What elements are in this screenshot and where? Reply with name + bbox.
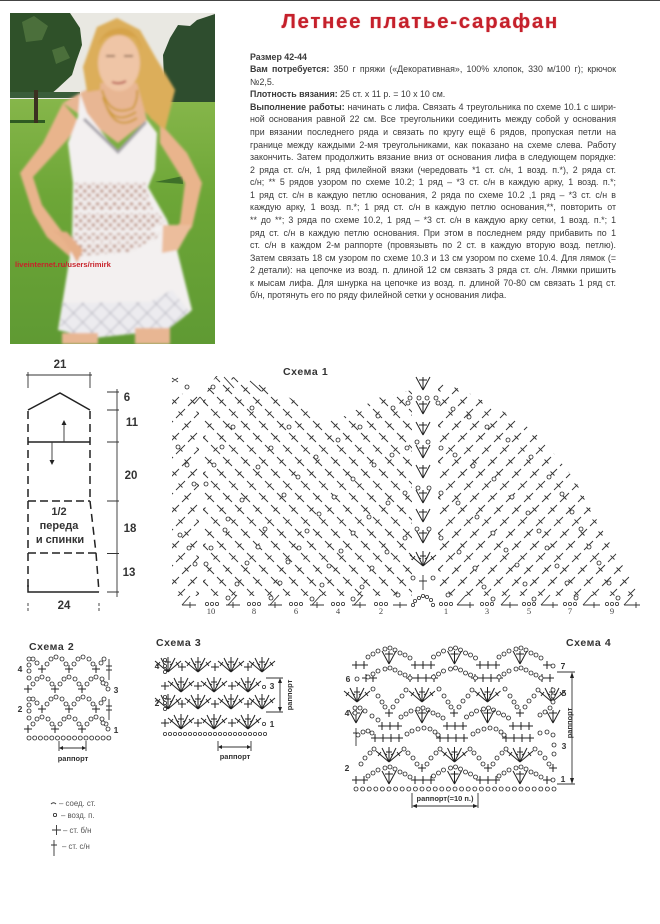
scheme 3 heading: Схема 3 — [156, 637, 201, 649]
pattern outline: half of front and back — [26, 359, 139, 612]
scheme 1: base row: 6 — [294, 606, 298, 616]
scheme 3 — [155, 637, 294, 761]
scheme 2 row numbers: 4 — [18, 664, 23, 674]
scheme 2 — [18, 641, 119, 763]
scheme 4 chart — [344, 648, 565, 789]
instructions text: к мысам лифа. Для шнурка на цепочке из возд. п. длиной 70-80 см связать 1 ряд ст. — [250, 278, 616, 288]
legend of symbols — [51, 799, 96, 856]
legend: single crochet: – ст. б/н — [63, 826, 91, 835]
instructions text: закончить. Затем продолжить вязание вниз от основания лифа в следующем порядке: — [250, 152, 616, 162]
photo background: grass and trees — [10, 13, 215, 344]
instructions text: Затем связать 18 см узором по схеме 10.3 и 13 см узором по схеме 10.4. Для лямок (= — [250, 253, 616, 263]
scheme 3 chart — [155, 657, 275, 734]
instructions text: ной основания равной 22 см. Все треугольники соединить между собой у основания — [250, 114, 616, 124]
scheme 4 heading: Схема 4 — [566, 637, 611, 649]
instructions text: с/н; ** 5 рядов узором по схеме 10.2; 1 ряд – *3 ст. с/н в каждую арку, 1 возд. п.*; — [250, 177, 616, 187]
scheme 1 heading: Схема 1 — [283, 366, 328, 378]
scheme 3 row numbers: 3 — [270, 681, 275, 691]
scheme 4 row numbers: 5 — [562, 688, 567, 698]
instructions text: Выполнение работы: начинать с лифа. Связать 4 треугольника по схеме 10.1 с шири- — [250, 102, 616, 112]
photo: woman in white crochet dress — [10, 13, 215, 344]
dimension 24: 24 — [58, 600, 71, 612]
scheme 1: base row: 4 — [336, 606, 341, 616]
scheme 2 repeat arrow: раппорт — [58, 754, 89, 763]
scheme 3 row numbers: 1 — [270, 719, 275, 729]
photo: model figure — [20, 18, 202, 344]
scheme 1: base row — [182, 595, 640, 616]
scheme 4 row numbers: 1 — [561, 774, 566, 784]
instructions text: Плотность вязания: 25 ст. х 11 р. = 10 х 10 см. — [250, 89, 445, 99]
garment outline — [28, 393, 99, 592]
instructions text — [250, 52, 616, 300]
scheme 1: base row: 1 — [444, 606, 448, 616]
height dimensions: 13 — [123, 567, 135, 579]
instructions text: 2 ряда ст. с/н, 1 ряд филейной вязки (чередовать *1 ст. с/н, 1 возд. п.*), 2 ряда ст. — [250, 165, 616, 175]
instructions text: при вязании последнего ряда и связать по кругу ещё 6 рядов, пропуская петли на — [250, 127, 616, 137]
scheme 3 side repeat arrow: раппорт — [285, 679, 294, 710]
dimension 24 — [28, 600, 99, 612]
legend: slip stitch: – соед. ст. — [59, 799, 96, 808]
legend: chain stitch: – возд. п. — [61, 811, 94, 820]
scheme 3 bottom repeat arrow: раппорт — [220, 752, 251, 761]
scheme 1: chain rings — [178, 387, 618, 599]
height dimensions: 11 — [126, 417, 139, 429]
watermark: liveinternet.ru/users/rimirk — [15, 260, 112, 269]
scheme 4 row numbers: 6 — [346, 674, 351, 684]
height dimensions: 20 — [125, 470, 137, 482]
dimension 21 — [26, 359, 92, 388]
dimension 21: 21 — [54, 359, 67, 371]
instructions text: ** до **; 3 ряда по схеме 10.2, 1 ряд – *3 ст. с/н в каждую арку сетки, 1 возд. п.*; 1 — [250, 215, 616, 225]
instructions text: ряд ст. с/н в каждую петлю основания. При этом в последнем ряду прибавить по 1 — [250, 228, 616, 238]
scheme 4 row numbers: 2 — [345, 763, 350, 773]
scheme 2 row numbers: 2 — [18, 704, 23, 714]
scheme 1: base row: 9 — [610, 606, 614, 616]
scheme 3 row numbers: 2 — [155, 698, 160, 708]
scheme 4 row numbers: 3 — [562, 741, 567, 751]
instructions text: б/н, протянуть его по ряду филейной сетки у основания лифа. — [250, 290, 506, 300]
instructions text: 1 ряд ст. с/н в каждую петлю основания, 2 ряда по схеме 10.2 ,1 ряд – *3 ст. с/н в — [250, 190, 616, 200]
scheme 3 row numbers: 4 — [155, 661, 160, 671]
scheme 1: base row: 8 — [252, 606, 256, 616]
scheme 1: base row: 3 — [485, 606, 489, 616]
scheme 1: base row: 2 — [379, 606, 383, 616]
label: 1/2 front and back: и спинки — [36, 534, 84, 546]
page top edge — [0, 0, 660, 1]
instructions text: Размер 42-44 — [250, 52, 307, 62]
scheme 2 heading: Схема 2 — [29, 641, 74, 653]
instructions text: ст. с/н в каждом 2-м раппорте (провязывть по 2 ст. в каждую вторую возд. петлю). — [250, 240, 616, 250]
height dimensions — [107, 389, 139, 597]
height dimensions: 18 — [124, 523, 137, 535]
scheme 2 chart — [28, 657, 112, 738]
scheme 1: base row: 7 — [568, 606, 572, 616]
scheme 4 row numbers: 4 — [345, 708, 350, 718]
instructions text: 2 детали): на цепочке из возд. п. длиной 12 см связать 3 ряда ст. с/н. Лямки пришить — [250, 265, 616, 275]
label: 1/2 front and back: 1/2 — [51, 506, 67, 518]
scheme 4 bottom repeat arrow: раппорт(=10 п.) — [417, 794, 474, 803]
instructions text: каждую арку, 1 возд. п.*; 1 ряд ст. с/н в каждую петлю основания,**, повторить от — [250, 202, 616, 212]
scheme 1: base row: 5 — [527, 606, 531, 616]
scheme 1: base row: 10 — [207, 606, 215, 616]
scheme 4 row numbers: 7 — [561, 661, 566, 671]
scheme 4 bottom repeat arrow — [412, 793, 478, 808]
legend: double crochet: – ст. с/н — [62, 842, 90, 851]
instructions text: Вам потребуется: 350 г пряжи («Декоративная», 100% хлопок, 330 м/100 г); крючок — [250, 64, 616, 74]
scheme 4 side repeat arrow: раппорт — [565, 707, 574, 738]
scheme 1: crochet chart — [172, 376, 642, 616]
scheme 2 row numbers: 3 — [114, 685, 119, 695]
scheme 1: central fans — [410, 377, 436, 605]
scheme 2 row numbers: 1 — [114, 725, 119, 735]
scheme 4 side repeat arrow — [557, 672, 575, 784]
instructions text: №2,5. — [250, 77, 274, 87]
scheme 4 — [344, 637, 611, 808]
instructions text: границе между каждыми 2-мя треугольниками, как показано на схеме слева. Работу — [250, 140, 616, 150]
title: Летнее платье-сарафан — [282, 10, 559, 33]
height dimensions: 6 — [124, 392, 130, 404]
label: 1/2 front and back: переда — [40, 520, 79, 532]
